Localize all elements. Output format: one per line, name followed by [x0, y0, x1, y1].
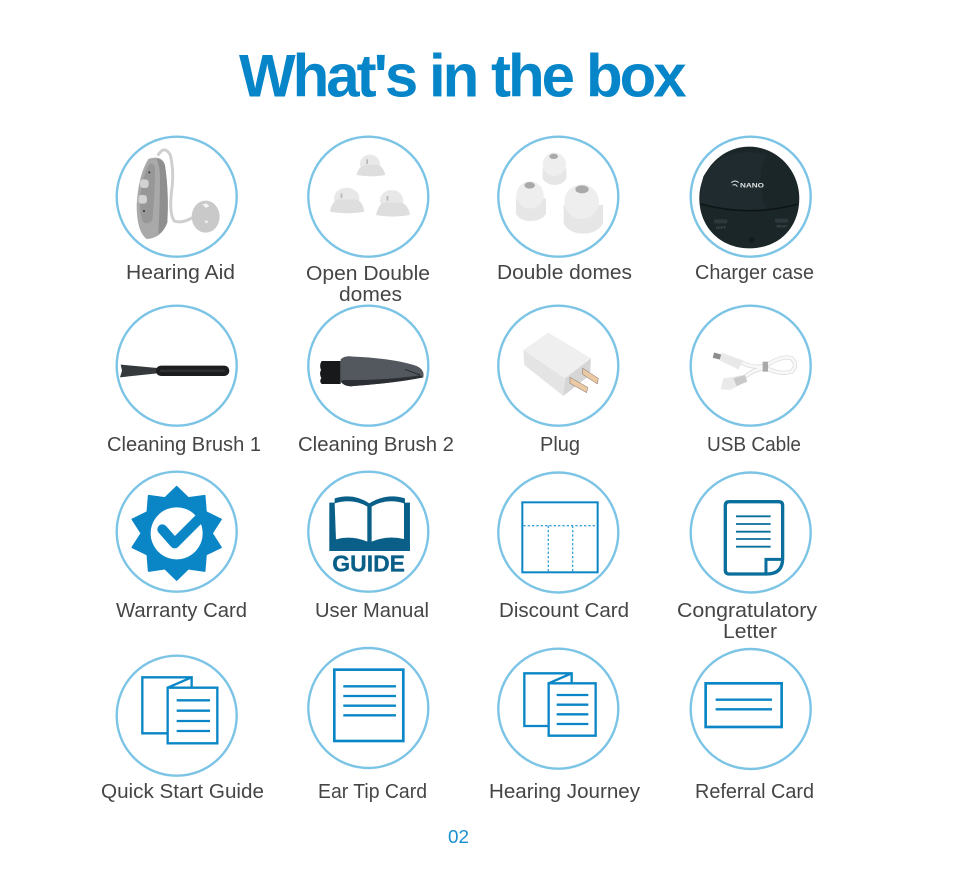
title: box [586, 43, 686, 110]
first label line and second label line: Letter [723, 621, 777, 643]
item: Hearing Aid [117, 137, 237, 284]
label: User Manual [315, 600, 429, 622]
item: Discount Card [498, 472, 629, 622]
icon: cleaning brush 2 [308, 306, 428, 426]
icon: card with lines [308, 648, 428, 768]
first label line and second label line: Congratulatory [677, 600, 817, 622]
item: Warranty Card [116, 472, 247, 622]
item: Double domes [497, 137, 632, 284]
icon: charger case: LEFT [716, 226, 727, 230]
item: Charger case [691, 137, 814, 284]
title: the [491, 43, 586, 110]
item: User Manual [308, 472, 429, 622]
icon: double domes [498, 137, 618, 257]
label: Discount Card [499, 600, 629, 622]
item: Plug [498, 306, 618, 456]
label: Cleaning Brush 2 [298, 434, 454, 456]
item: Hearing Journey [489, 649, 640, 803]
label: Referral Card [695, 781, 814, 803]
icon: guide book [308, 472, 428, 592]
item: Referral Card [691, 649, 814, 803]
icon: USB cable [691, 306, 811, 426]
icon: charger case [691, 137, 811, 257]
icon: hearing aid [117, 137, 237, 257]
icon: warranty badge [117, 472, 237, 592]
item: Cleaning Brush 1 [107, 306, 261, 456]
item: USB Cable [691, 306, 811, 456]
label: Ear Tip Card [318, 781, 427, 803]
icon: guide book: GUIDE [332, 551, 405, 577]
icon: open double domes [308, 137, 428, 257]
page number: 02 [448, 827, 469, 847]
icon: letter [691, 472, 811, 592]
label: Warranty Card [116, 600, 247, 622]
label: Cleaning Brush 1 [107, 434, 261, 456]
item: Cleaning Brush 2 [298, 306, 454, 456]
first label line and second label line: domes [339, 284, 402, 306]
first label line and second label line [677, 600, 817, 643]
label: Hearing Journey [489, 781, 640, 803]
icon: charger case: NANO [740, 182, 764, 189]
item: Ear Tip Card [308, 648, 428, 803]
item: Open Double domes [306, 137, 430, 306]
title: What's [239, 43, 429, 110]
item: Congratulatory Letter [677, 472, 817, 643]
label: Quick Start Guide [101, 781, 264, 803]
label: Double domes [497, 262, 632, 284]
label: Charger case [695, 262, 814, 284]
label: USB Cable [707, 434, 801, 456]
icon: folded leaflet [117, 656, 237, 776]
icon: folded leaflet [498, 649, 618, 769]
icon: cleaning brush 1 [117, 306, 237, 426]
icon: card with two lines [691, 649, 811, 769]
label: Hearing Aid [126, 262, 235, 284]
item: Quick Start Guide [101, 656, 264, 803]
icon: plug [498, 306, 618, 426]
title: in [429, 43, 490, 110]
label: Plug [540, 434, 580, 456]
first label line and second label line: Open Double [306, 263, 430, 285]
icon: charger case: RIGHT [777, 224, 788, 228]
icon: discount card [498, 472, 618, 592]
first label line and second label line [306, 263, 430, 306]
